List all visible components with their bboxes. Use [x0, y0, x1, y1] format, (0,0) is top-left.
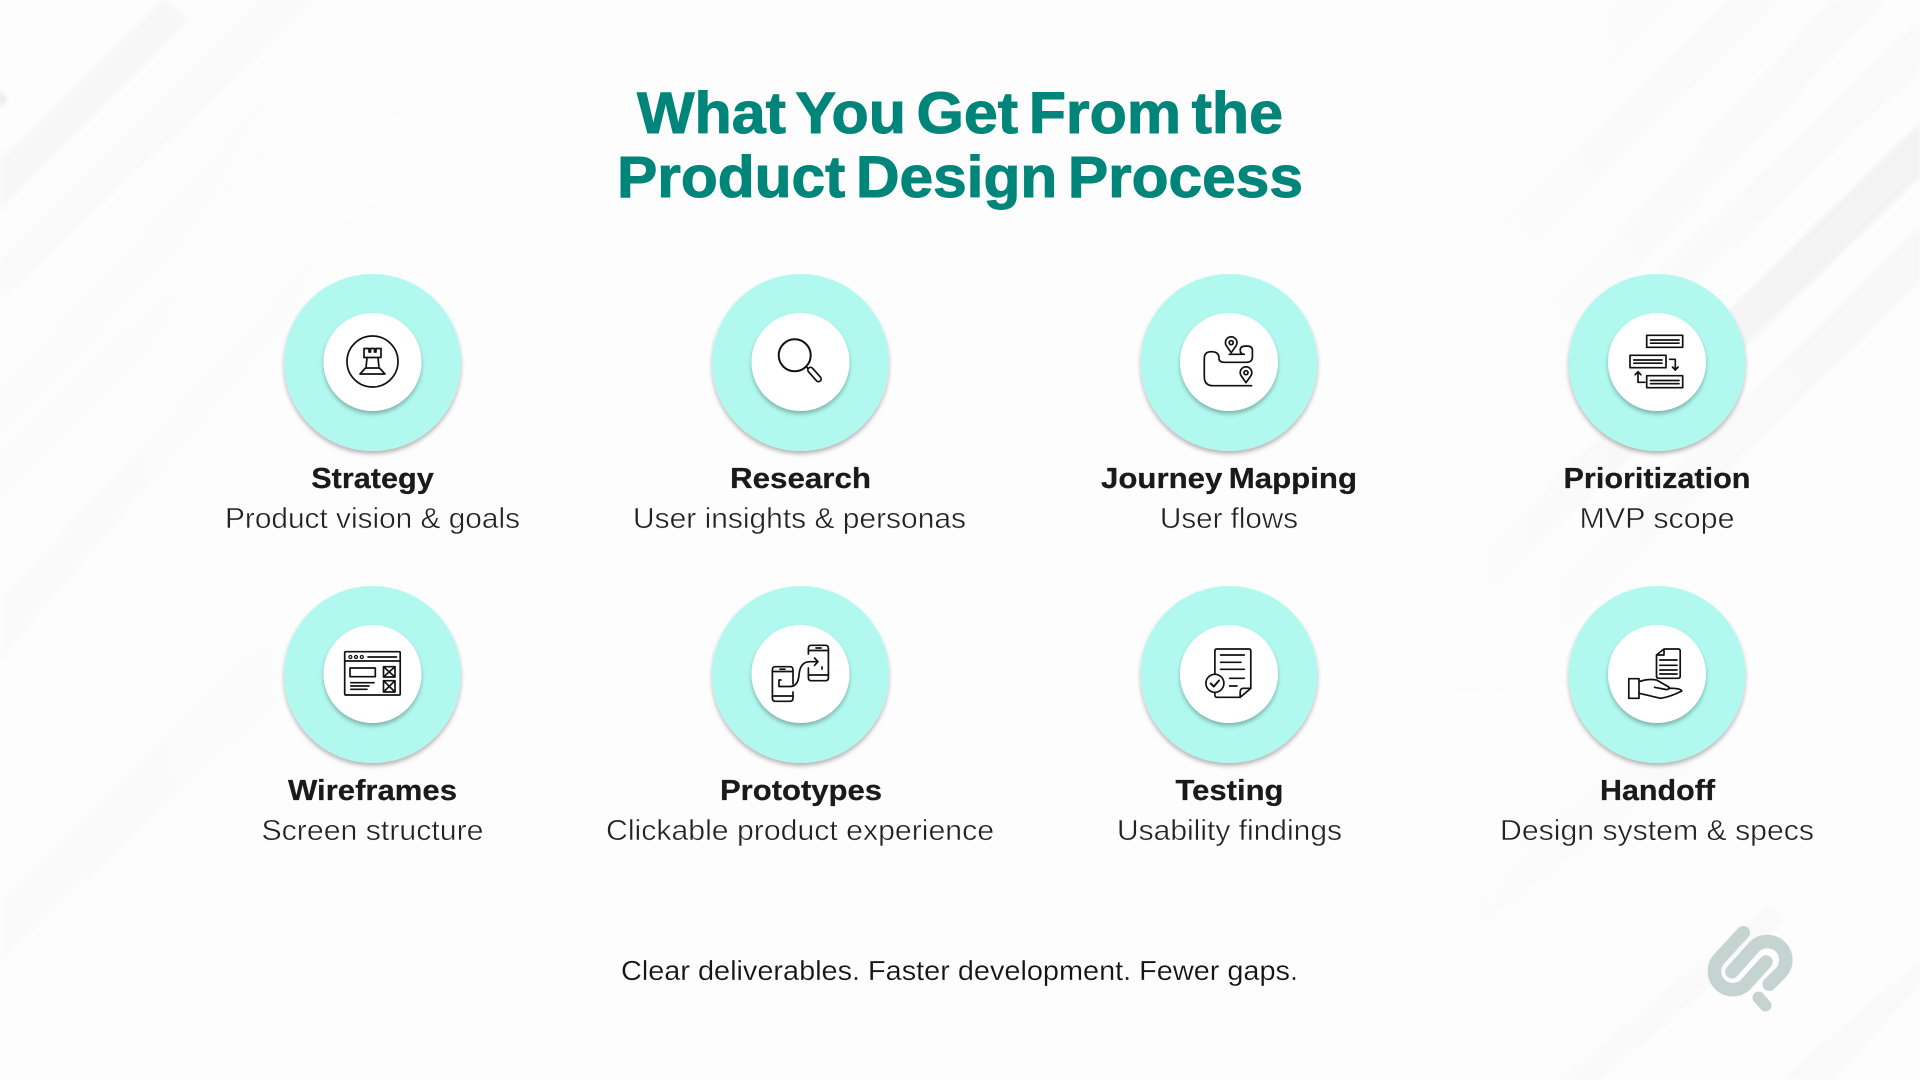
- description: Product vision & goals: [225, 503, 520, 535]
- icon badge: checked document: [1140, 586, 1318, 763]
- heading: Testing: [1176, 775, 1284, 807]
- footer tagline: Clear deliverables. Faster development. Fewer gaps.: [621, 955, 1298, 986]
- card: Journey Mapping: [1101, 274, 1357, 535]
- card: Prioritization: [1564, 274, 1750, 535]
- card: Testing: [1117, 586, 1342, 847]
- description: Design system & specs: [1500, 815, 1814, 847]
- heading: Prototypes: [720, 775, 882, 807]
- icon badge: magnifying glass: [712, 274, 889, 451]
- heading: Research: [730, 463, 871, 495]
- card: Wireframes: [262, 586, 484, 847]
- card: Strategy: [225, 274, 520, 535]
- title: What You Get From the: [637, 81, 1283, 146]
- heading: Journey Mapping: [1101, 463, 1357, 495]
- description: Screen structure: [262, 815, 484, 847]
- description: MVP scope: [1580, 503, 1734, 535]
- heading: Prioritization: [1564, 463, 1750, 495]
- card: Research: [633, 274, 966, 535]
- description: User insights & personas: [633, 503, 966, 535]
- icon badge: hand with document: [1568, 586, 1746, 763]
- heading: Wireframes: [288, 775, 457, 807]
- description: Usability findings: [1117, 815, 1342, 847]
- logo: [1714, 933, 1786, 1006]
- icon badge: chess rook: [284, 274, 461, 451]
- description: User flows: [1160, 503, 1298, 535]
- card: Prototypes: [606, 586, 994, 847]
- icon badge: route map: [1140, 274, 1318, 451]
- icon badge: wireframe window: [284, 586, 461, 763]
- title: [617, 81, 1303, 210]
- heading: Handoff: [1600, 775, 1716, 807]
- icon badge: reordered lists: [1568, 274, 1746, 451]
- description: Clickable product experience: [606, 815, 994, 847]
- card: Handoff: [1500, 586, 1814, 847]
- title: Product Design Process: [617, 145, 1303, 210]
- icon badge: linked phones: [712, 586, 889, 763]
- heading: Strategy: [311, 463, 434, 495]
